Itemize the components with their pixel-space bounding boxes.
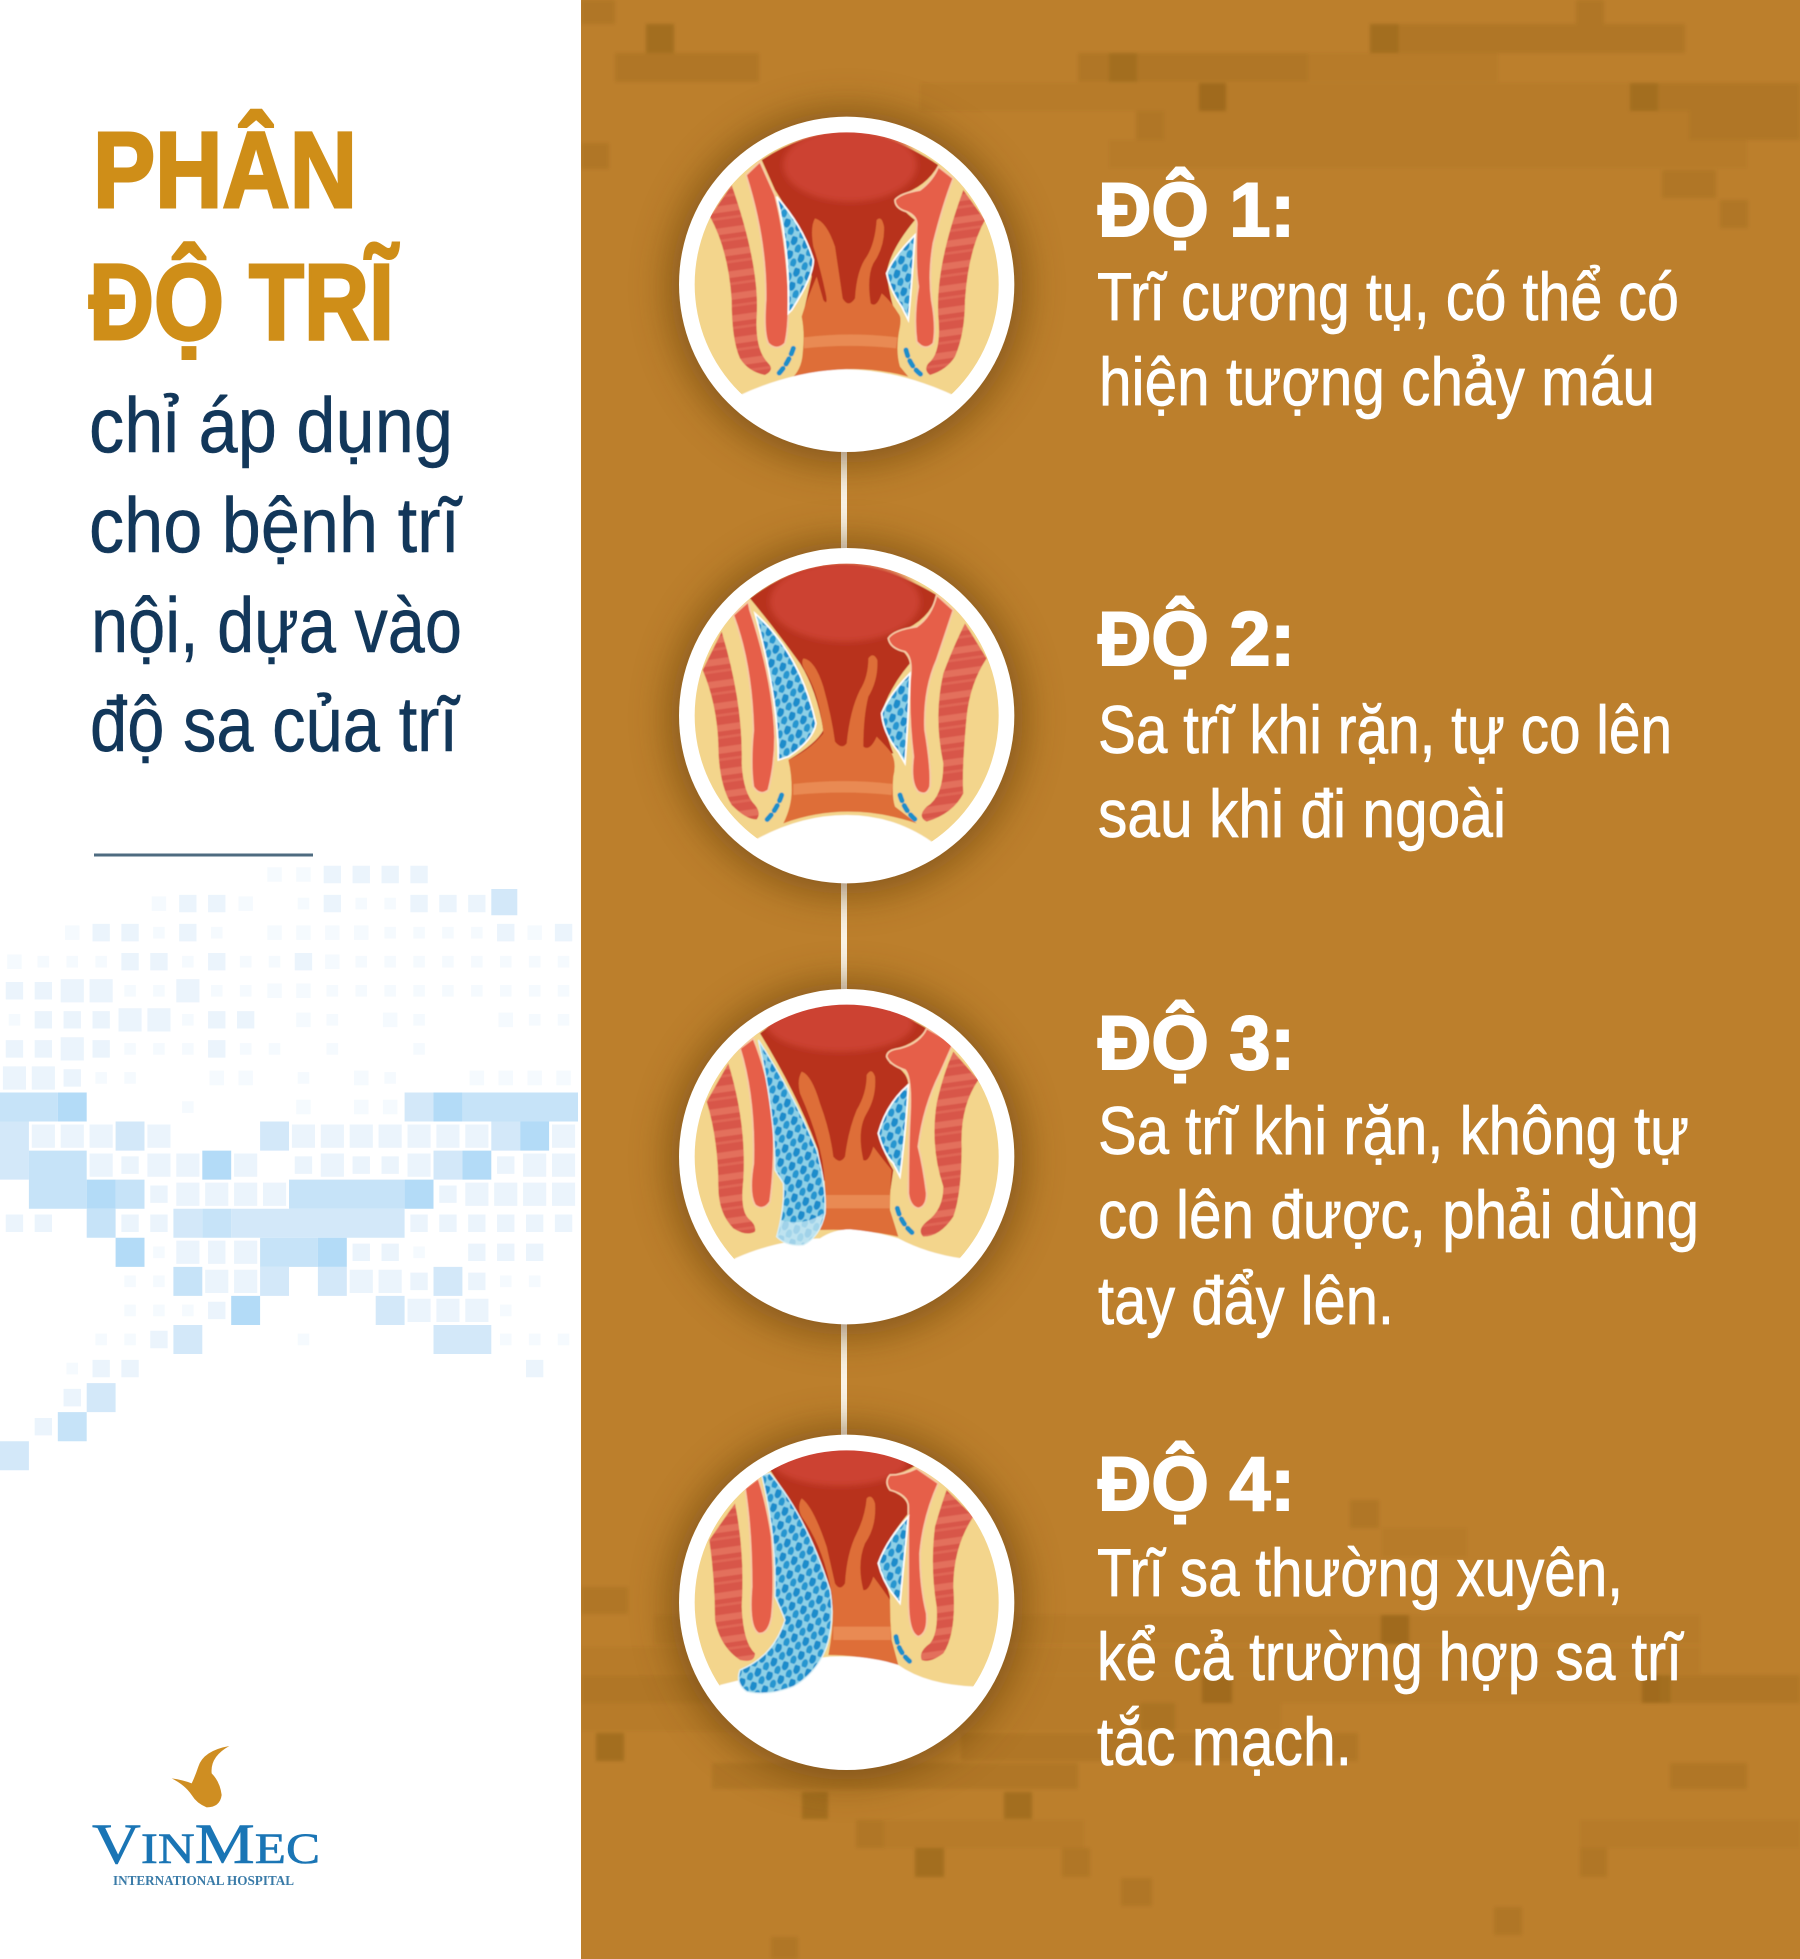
subtitle text block: nội, dựa vào — [91, 581, 462, 669]
description: grade 4 — [1097, 1535, 1685, 1780]
circle: grade 1 illustration — [660, 111, 1027, 467]
description: grade 1: Trĩ cương tụ, có thể có — [1097, 259, 1679, 335]
text block: grade 3 — [1098, 1001, 1699, 1339]
description: grade 2: sau khi đi ngoài — [1098, 776, 1506, 852]
description: grade 1 — [1097, 259, 1679, 420]
logo: Vinmec — [92, 1746, 320, 1888]
subtitle text block: cho bệnh trĩ — [89, 481, 463, 569]
title: ĐỘ TRĨ — [89, 241, 399, 362]
description: grade 4: tắc mạch. — [1097, 1704, 1352, 1780]
panel: left white background — [0, 0, 581, 1959]
description: grade 3: Sa trĩ khi rặn, không tự — [1098, 1093, 1689, 1169]
subtitle text block — [89, 381, 463, 768]
connector line — [841, 450, 847, 1450]
description: grade 3: co lên được, phải dùng — [1098, 1177, 1699, 1253]
text block: grade 2 — [1098, 597, 1672, 852]
description: grade 4: Trĩ sa thường xuyên, — [1097, 1535, 1623, 1611]
text block: grade 1 — [1097, 168, 1679, 420]
description: grade 3 — [1098, 1093, 1699, 1339]
text block: grade 4 — [1097, 1442, 1685, 1780]
logo tagline: INTERNATIONAL HOSPITAL — [113, 1873, 294, 1888]
blue pixel pattern — [0, 866, 578, 1470]
description: grade 2: Sa trĩ khi rặn, tự co lên — [1098, 692, 1672, 768]
subtitle text block: chỉ áp dụng — [89, 381, 453, 469]
heading: grade 4: ĐỘ 4: — [1098, 1442, 1295, 1527]
title: PHÂN — [93, 109, 357, 230]
heading: grade 2: ĐỘ 2: — [1098, 597, 1295, 682]
circle: grade 3 illustration — [660, 983, 1027, 1347]
title — [89, 109, 399, 362]
circle: grade 4 illustration — [660, 1428, 1027, 1787]
icon: golden swoosh — [172, 1746, 229, 1807]
subtitle text block: độ sa của trĩ — [90, 680, 461, 768]
heading: grade 3: ĐỘ 3: — [1098, 1001, 1295, 1086]
description: grade 2 — [1098, 692, 1672, 852]
description: grade 4: kể cả trường hợp sa trĩ — [1097, 1619, 1685, 1695]
logo wordmark: VINMEC — [92, 1813, 320, 1876]
description: grade 1: hiện tượng chảy máu — [1099, 344, 1655, 420]
circle: grade 2 illustration — [660, 542, 1027, 897]
description: grade 3: tay đẩy lên. — [1098, 1263, 1394, 1339]
brown pixel pattern — [581, 0, 1800, 1959]
panel: right brown background — [581, 0, 1800, 1959]
heading: grade 1: ĐỘ 1: — [1098, 168, 1295, 253]
